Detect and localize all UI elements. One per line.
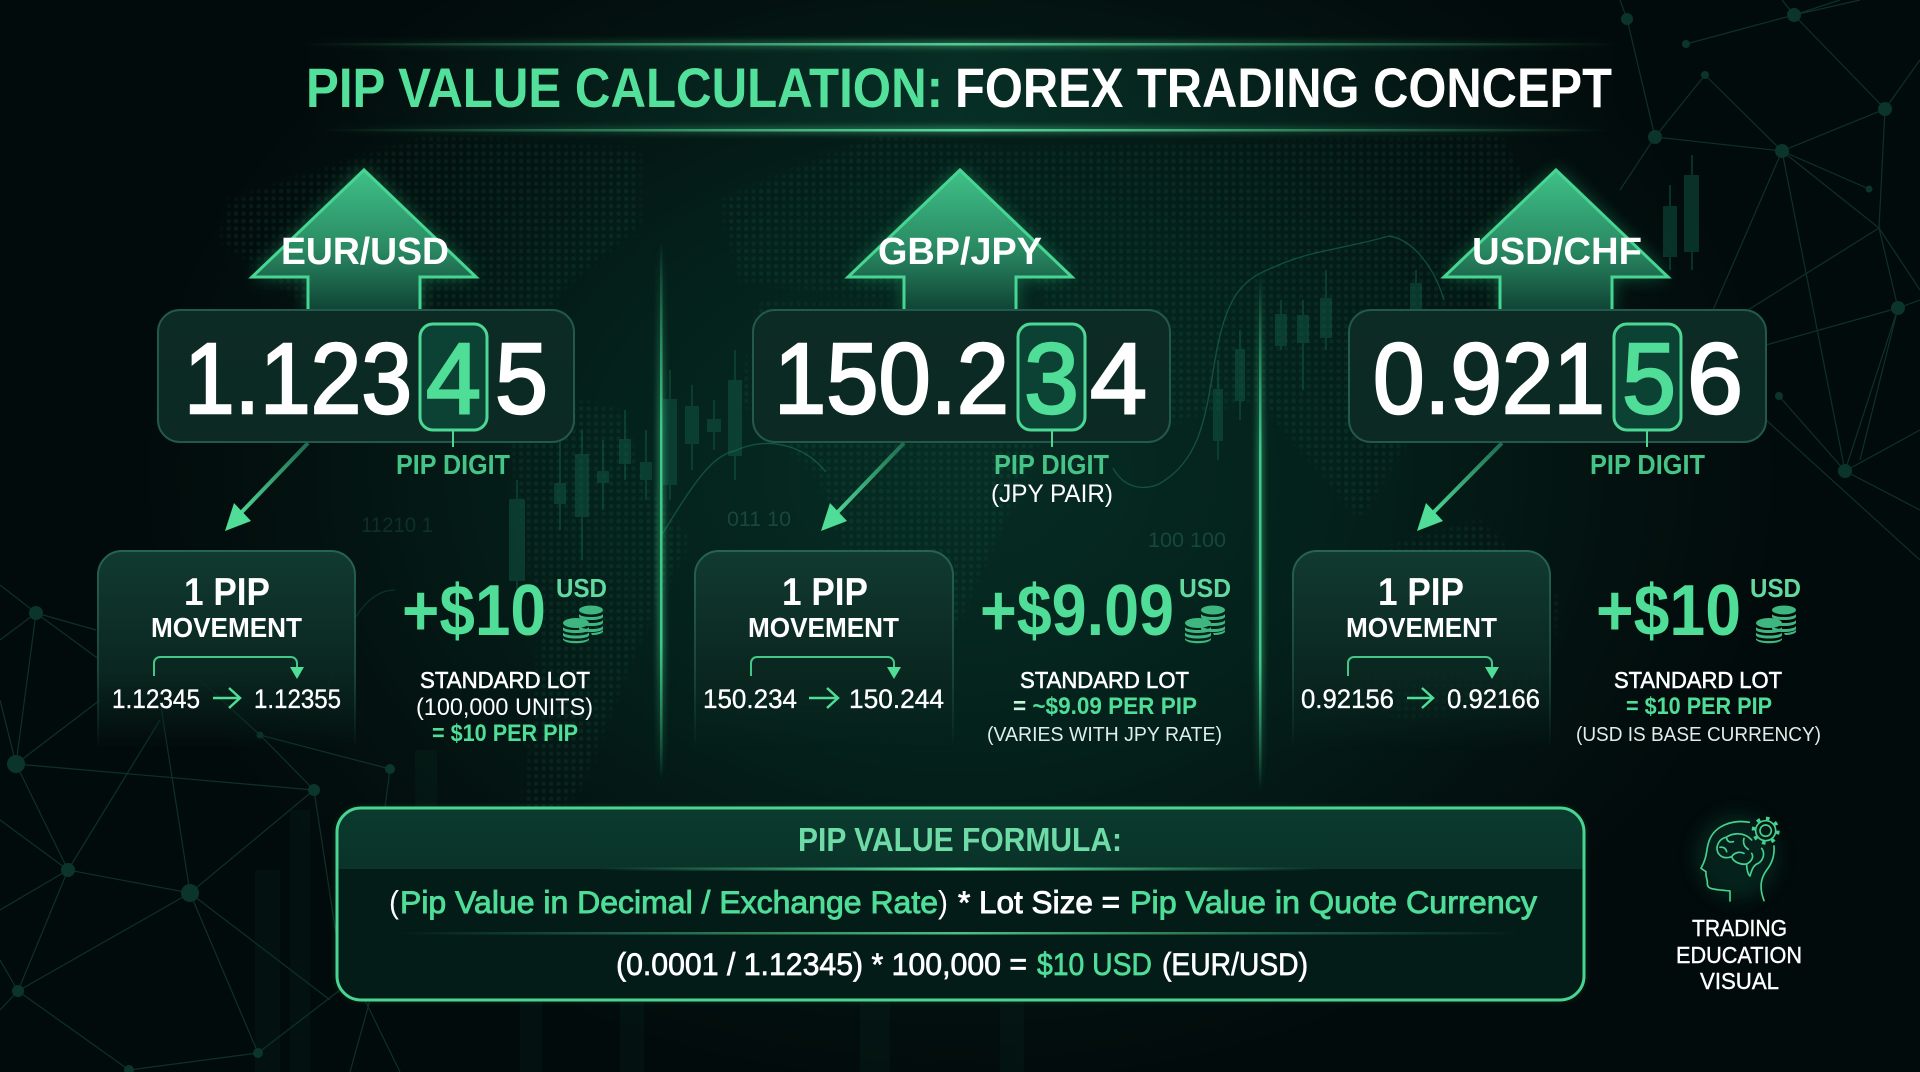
icon: up arrow xyxy=(848,170,1072,312)
worked example: $10 USD xyxy=(1037,946,1152,982)
faint volume bars xyxy=(255,750,1024,1072)
price change xyxy=(112,684,341,714)
price change: 0.92156 xyxy=(1301,684,1394,714)
panel: 1 pip movement xyxy=(1293,551,1550,750)
rate value: 5 xyxy=(495,323,548,435)
rate value: 150.2 xyxy=(774,323,1009,435)
lot description xyxy=(1576,667,1821,746)
divider: column two and three xyxy=(1256,270,1264,790)
caption: trading education visual: EDUCATION xyxy=(1676,942,1802,968)
currency label: USD xyxy=(556,573,607,603)
formula heading: PIP VALUE FORMULA: xyxy=(798,821,1122,858)
pip digit note: (JPY PAIR) xyxy=(991,480,1113,508)
rate value: 3 xyxy=(1024,323,1079,435)
icon: up arrow xyxy=(252,170,476,312)
faint curve lines xyxy=(325,236,1444,700)
currency label: USD xyxy=(1750,573,1801,603)
lot description: (VARIES WITH JPY RATE) xyxy=(987,723,1222,746)
arrow: diagonal to movement panel xyxy=(821,443,904,531)
arrow: diagonal to movement panel xyxy=(1417,443,1502,531)
candlesticks: faint chart xyxy=(510,155,1698,620)
faint ticker numbers: 11210 1 xyxy=(361,514,433,537)
icon: bracket arrow xyxy=(1348,657,1499,679)
icon: coins xyxy=(1756,606,1796,643)
icon: coins xyxy=(563,606,603,643)
formula line: ) xyxy=(938,884,948,920)
heading: 1 PIP xyxy=(1378,571,1464,614)
pair label: EUR/USD xyxy=(281,231,449,273)
lot description: (USD IS BASE CURRENCY) xyxy=(1576,723,1821,746)
lot description: (100,000 UNITS) xyxy=(416,694,593,721)
caption: trading education visual: VISUAL xyxy=(1700,968,1779,994)
worked example: (0.0001 / 1.12345) * 100,000 = xyxy=(616,946,1027,982)
heading: 1 PIP xyxy=(782,571,868,614)
pip digit highlight xyxy=(420,324,487,447)
pip digit label: PIP DIGIT xyxy=(396,449,510,480)
panel: pip value formula xyxy=(337,808,1584,1000)
lot description: = $10 PER PIP xyxy=(432,720,578,747)
icon: up arrow xyxy=(1444,170,1668,312)
subheading: MOVEMENT xyxy=(1346,612,1497,643)
pair label: GBP/JPY xyxy=(878,231,1042,273)
network: left xyxy=(0,585,400,1072)
title text: PIP VALUE CALCULATION: xyxy=(306,57,943,119)
lot description: = $10 PER PIP xyxy=(1626,693,1772,720)
rate value: 4 xyxy=(1090,323,1147,435)
lot description: STANDARD LOT xyxy=(1020,667,1189,693)
column: EUR/USD xyxy=(98,170,607,750)
rate panel xyxy=(158,310,574,447)
pip digit highlight xyxy=(1018,324,1085,447)
icon: bracket arrow xyxy=(751,657,901,679)
rate panel xyxy=(1349,310,1766,447)
lot description xyxy=(416,667,593,747)
formula line: Pip Value in Quote Currency xyxy=(1130,884,1537,920)
panel: 1 pip movement xyxy=(695,551,953,750)
divider: column one and two xyxy=(657,240,665,780)
arrow: diagonal to movement panel xyxy=(225,443,308,531)
pip digit label: PIP DIGIT xyxy=(1590,449,1705,480)
price change: 1.12355 xyxy=(254,684,341,714)
subheading: MOVEMENT xyxy=(151,612,302,643)
icon: coins xyxy=(1185,606,1225,643)
pip digit highlight xyxy=(1614,324,1681,447)
world map dot pattern xyxy=(222,136,1558,806)
icon: bracket arrow xyxy=(154,657,304,679)
pip value amount: +$9.09 xyxy=(980,571,1174,651)
network: right xyxy=(1620,0,1920,560)
formula line: * Lot Size = xyxy=(958,884,1120,920)
pip digit label: PIP DIGIT xyxy=(994,449,1109,480)
rate value: 4 xyxy=(426,323,481,435)
price change: 150.234 xyxy=(703,684,797,714)
lot description: = ~$9.09 PER PIP xyxy=(1013,693,1197,720)
rate value: 0.921 xyxy=(1373,323,1605,435)
pip value amount: +$10 xyxy=(402,571,546,651)
faint ticker numbers: 011 10 xyxy=(727,508,791,531)
faint ticker numbers xyxy=(361,508,1226,552)
title text: FOREX TRADING CONCEPT xyxy=(955,57,1612,119)
worked example: (EUR/USD) xyxy=(1162,946,1308,982)
heading: 1 PIP xyxy=(184,571,270,614)
price change xyxy=(1301,684,1540,714)
lot description: STANDARD LOT xyxy=(1614,667,1782,693)
caption: trading education visual xyxy=(1676,915,1802,994)
lot description xyxy=(987,667,1222,746)
currency label: USD xyxy=(1179,573,1231,603)
rate value: 1.123 xyxy=(184,323,412,435)
formula line: ( xyxy=(389,884,399,920)
faint ticker numbers: 100 100 xyxy=(1148,529,1226,552)
subheading: MOVEMENT xyxy=(748,612,899,643)
lot description: STANDARD LOT xyxy=(420,667,590,693)
rate panel xyxy=(753,310,1170,447)
panel: 1 pip movement xyxy=(98,551,355,750)
caption: trading education visual: TRADING xyxy=(1692,915,1787,941)
column: GBP/JPY xyxy=(695,170,1231,750)
price change xyxy=(703,684,944,714)
rate value: 5 xyxy=(1622,323,1676,435)
price change: 150.244 xyxy=(849,684,944,714)
column: USD/CHF xyxy=(1293,170,1821,750)
title banner xyxy=(300,40,1621,134)
rate value: 6 xyxy=(1687,323,1743,435)
pair label: USD/CHF xyxy=(1472,231,1642,273)
pip value amount: +$10 xyxy=(1596,571,1741,651)
price change: 1.12345 xyxy=(112,684,200,714)
icon: brain and gear xyxy=(1695,813,1778,901)
formula line: Pip Value in Decimal / Exchange Rate xyxy=(400,884,938,920)
price change: 0.92166 xyxy=(1447,684,1540,714)
